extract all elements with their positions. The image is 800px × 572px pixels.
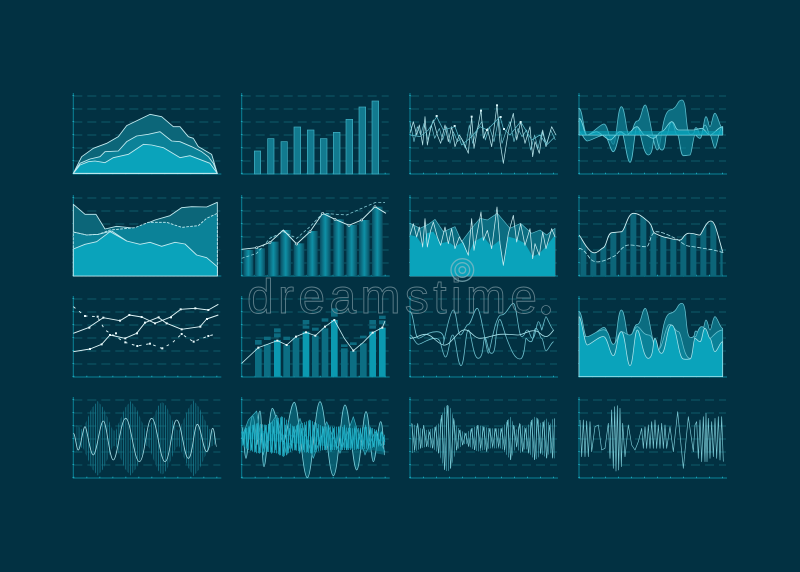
watermark: spiral logo — [451, 259, 474, 281]
chart: bars with trend line — [242, 195, 390, 276]
chart: jagged filled area — [410, 195, 558, 281]
chart: dense layered waveform — [242, 397, 390, 478]
chart: carrier wave with smooth envelope — [73, 397, 221, 478]
chart: mirrored waves around axis — [579, 93, 727, 174]
chart: overlapping flowing areas — [73, 195, 221, 276]
chart: striped area with dashed line — [579, 195, 727, 276]
chart: stacked segment bars with trend line — [242, 296, 390, 377]
watermark: dreamstime wordmark: dreamstime — [247, 271, 537, 324]
chart: vertical spike waveform — [410, 397, 558, 478]
chart: rising bars — [242, 93, 390, 174]
chart: layered area mountain — [73, 93, 221, 174]
chart: jagged lines with markers — [410, 93, 558, 174]
chart: variable frequency waveform — [579, 397, 727, 478]
chart: smooth line series — [410, 296, 558, 377]
chart: three line series with markers — [73, 296, 221, 377]
chart: overlapping wave areas — [579, 296, 727, 377]
